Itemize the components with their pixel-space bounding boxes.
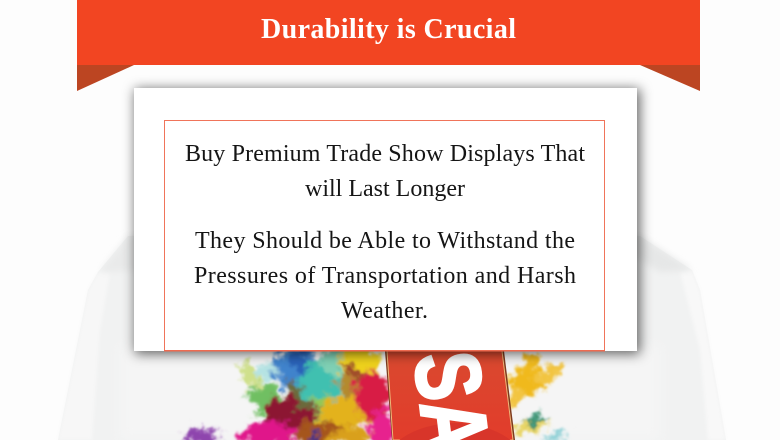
headline text: Buy Premium Trade Show Displays That <box>185 141 585 167</box>
inner border bottom <box>164 350 605 352</box>
title banner <box>77 0 700 65</box>
banner folds <box>77 65 700 91</box>
body text: Pressures of Transportation and Harsh <box>194 263 576 289</box>
paint explosion: left cluster <box>180 346 396 440</box>
sale banner <box>385 352 515 440</box>
card shadow <box>135 89 640 354</box>
text card <box>134 88 637 352</box>
body text: Weather. <box>341 298 428 324</box>
paint explosion: right cluster <box>503 351 569 440</box>
headline text: will Last Longer <box>305 176 465 202</box>
headline text <box>185 141 585 202</box>
title: Durability is Crucial <box>261 14 516 45</box>
tablecloth photo <box>58 236 726 440</box>
body text <box>194 228 576 324</box>
inner border <box>164 120 604 351</box>
body text: They Should be Able to Withstand the <box>195 228 575 254</box>
